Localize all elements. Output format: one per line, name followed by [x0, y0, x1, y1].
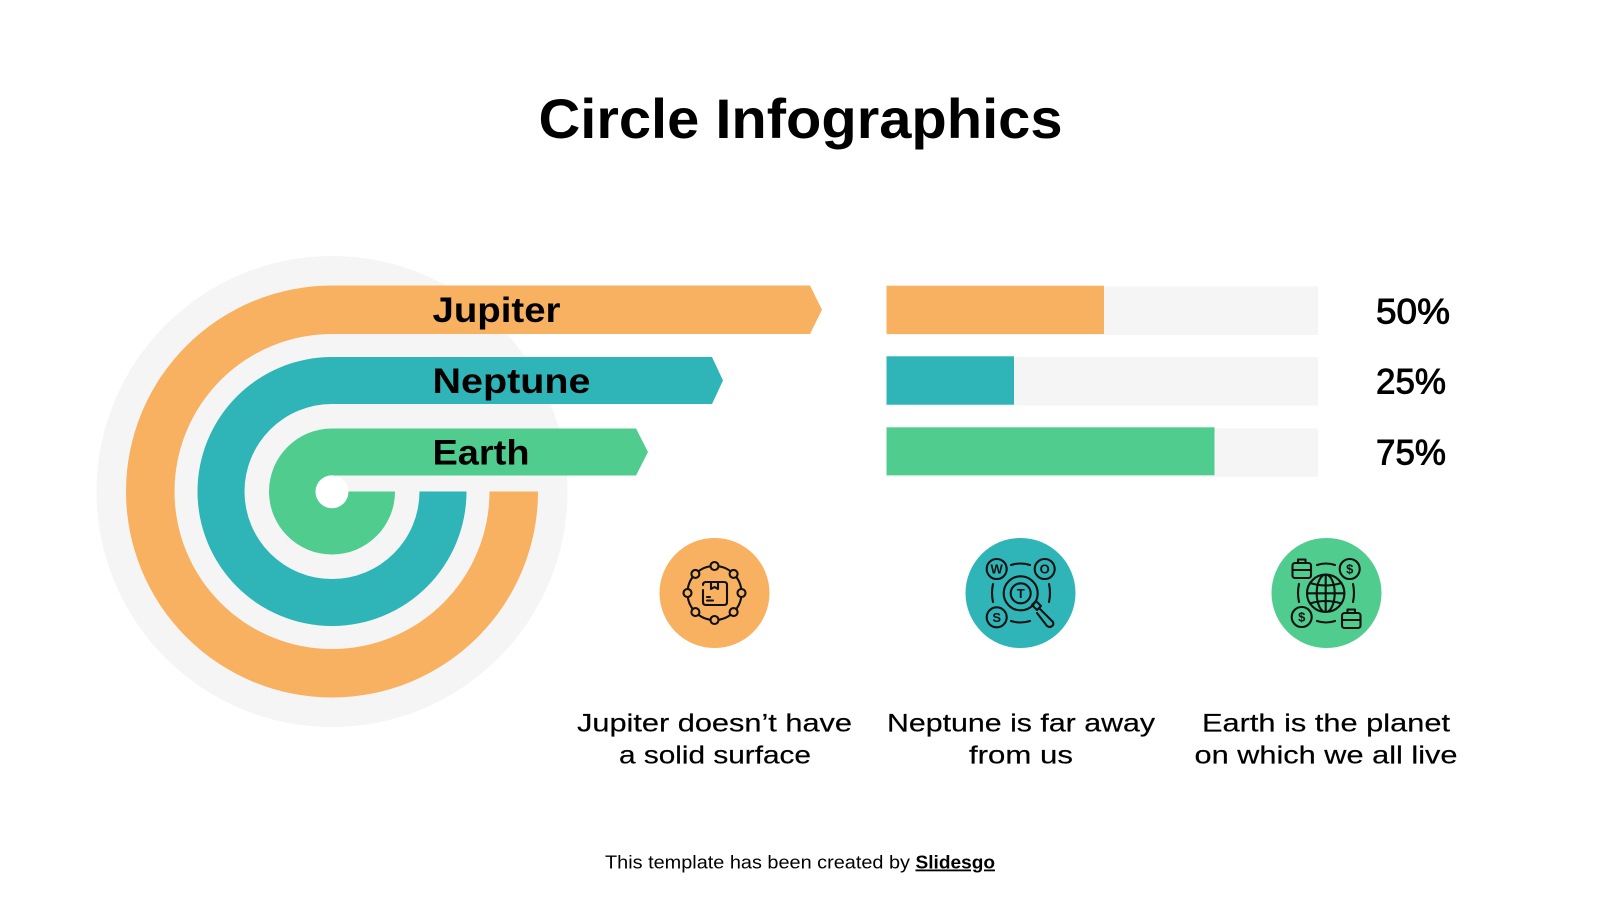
icon: WOTS search: W — [991, 562, 1004, 577]
progress bar: Earth 75% — [886, 427, 1446, 477]
circle spiral chart — [96, 256, 822, 727]
text: Neptune description: from us — [969, 741, 1073, 769]
progress bar: Neptune 25%: 25% — [1376, 362, 1446, 402]
band: Earth — [269, 428, 648, 555]
text: Neptune description — [887, 710, 1156, 769]
icon: package network — [660, 538, 770, 648]
band: Neptune — [198, 357, 723, 626]
icon: WOTS search: S — [992, 610, 1001, 625]
icon: WOTS search: O — [1040, 562, 1050, 577]
text: Neptune description: Neptune is far away — [887, 710, 1156, 738]
icon: WOTS search — [966, 538, 1076, 648]
band: Jupiter — [126, 286, 822, 698]
text: Earth description: Earth is the planet — [1202, 710, 1450, 738]
background circle — [96, 256, 568, 727]
text: Jupiter description: a solid surface — [619, 741, 811, 769]
footer credit: This template has been created by — [605, 852, 910, 872]
icon: global business: $ — [1298, 610, 1306, 625]
progress bar: Jupiter 50% — [886, 286, 1450, 335]
centre hole — [316, 475, 348, 508]
icon: WOTS search: T — [1017, 586, 1025, 601]
progress bar: Earth 75%: 75% — [1376, 434, 1446, 472]
footer credit: Slidesgo — [916, 852, 995, 872]
text: Jupiter description — [577, 710, 852, 769]
band: Jupiter: Jupiter — [432, 291, 561, 330]
icon: global business: $ — [1346, 562, 1354, 577]
icon: global business — [1272, 538, 1382, 648]
band: Neptune: Neptune — [432, 362, 590, 401]
text: Earth description: on which we all live — [1194, 741, 1458, 769]
text: Jupiter description: Jupiter doesn’t have — [577, 710, 852, 738]
progress bar: Jupiter 50%: 50% — [1376, 292, 1450, 331]
progress bar: Neptune 25% — [886, 356, 1446, 406]
title: Circle Infographics — [538, 87, 1062, 150]
band: Earth: Earth — [432, 434, 530, 472]
text: Earth description — [1194, 710, 1458, 769]
